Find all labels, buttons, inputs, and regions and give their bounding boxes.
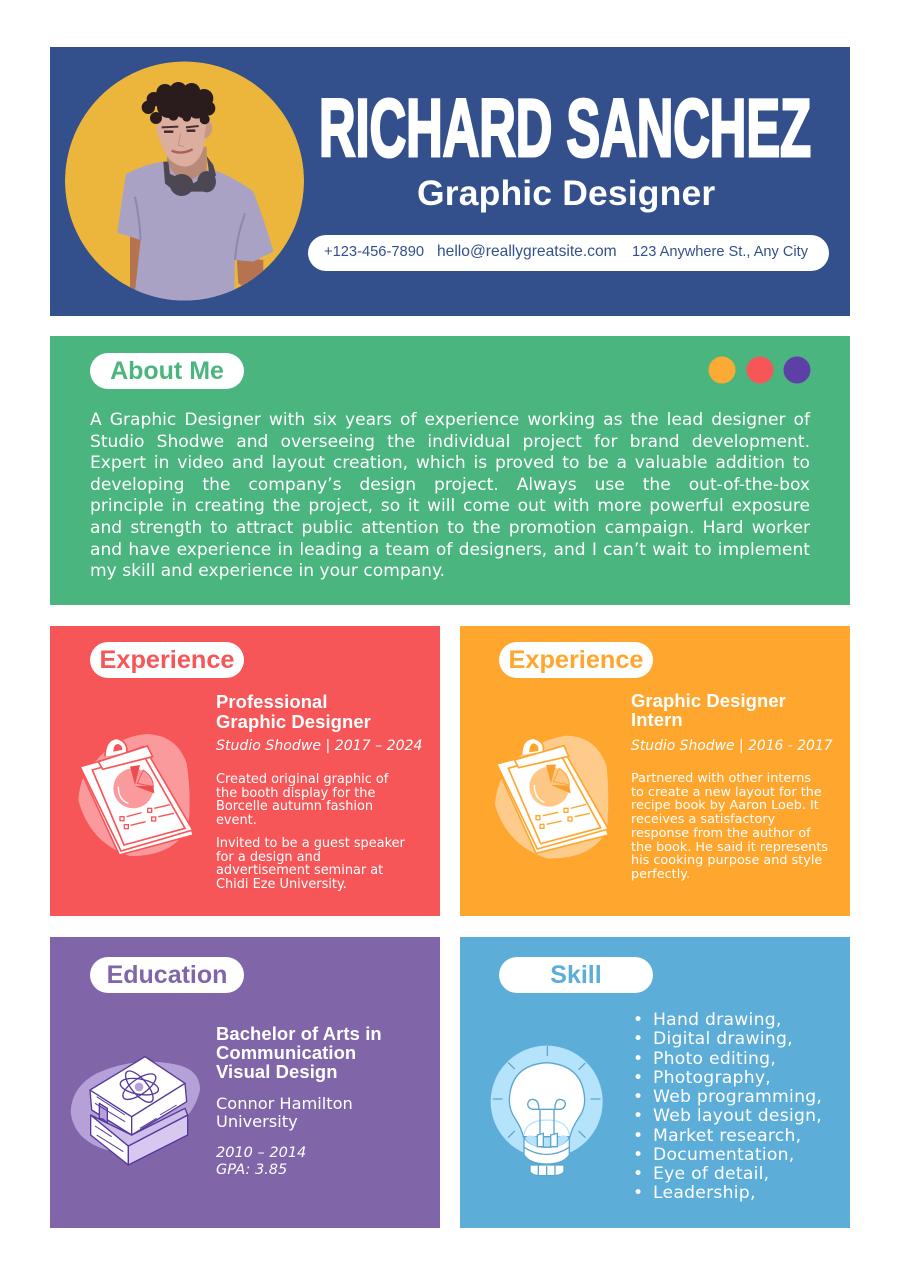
skills list: Photo editing, (653, 1048, 776, 1068)
job heading: Graphic Designer (216, 711, 371, 732)
job heading: Intern (631, 709, 683, 730)
job description: recipe book by Aaron Loeb. It (631, 798, 819, 813)
about text: Studio Shodwe and overseeing the individual project for brand development. (90, 432, 810, 452)
heading: education (90, 957, 244, 993)
job duties: Borcelle autumn fashion (216, 799, 373, 814)
job description: Partnered with other interns (631, 771, 811, 786)
speaking duties: for a design and (216, 850, 321, 865)
portrait photo (65, 62, 304, 300)
skills list: Photography, (653, 1068, 771, 1088)
panel: skills: • (633, 1010, 643, 1030)
degree heading: Visual Design (216, 1061, 338, 1082)
skills list: Hand drawing, (653, 1010, 782, 1030)
degree heading: Communication (216, 1042, 356, 1063)
skills list: Web layout design, (653, 1106, 822, 1126)
panel: education (50, 937, 440, 1228)
icon: clipboard chart (495, 736, 608, 858)
panel: experience professional (50, 626, 440, 916)
heading: experience (90, 642, 244, 678)
panel: about me (50, 336, 850, 605)
speaking duties (216, 836, 405, 892)
icon: books (70, 1056, 200, 1166)
panel: experience intern (460, 626, 850, 916)
job description: receives a satisfactory (631, 812, 775, 827)
dates and GPA: GPA: 3.85 (216, 1162, 287, 1178)
speaking duties: Chidi Eze University. (216, 877, 347, 892)
heading: skill: Skill (550, 961, 602, 989)
panel: skills: • (633, 1145, 643, 1165)
panel: skills: • (633, 1126, 643, 1146)
heading: experience (499, 642, 653, 678)
university: Connor Hamilton (216, 1094, 353, 1113)
degree heading (216, 1023, 382, 1082)
speaking duties: advertisement seminar at (216, 863, 383, 878)
university (216, 1094, 353, 1131)
job heading: Professional (216, 691, 328, 712)
panel: skills: • (633, 1087, 643, 1107)
about text: A Graphic Designer with six years of experience working as the lead designer of (90, 410, 810, 430)
job description: to create a new layout for the (631, 785, 822, 800)
job duties (216, 772, 389, 828)
skills list: Market research, (653, 1126, 801, 1146)
heading: skill (499, 957, 653, 993)
panel: skills (460, 937, 850, 1228)
job description: response from the author of (631, 826, 811, 841)
panel: skills: • (633, 1164, 643, 1184)
job description: perfectly. (631, 867, 690, 882)
panel: skills: • (633, 1029, 643, 1049)
address: 123 Anywhere St., Any City (632, 244, 808, 260)
university: University (216, 1112, 298, 1131)
job description: the book. He said it represents (631, 840, 828, 855)
degree heading: Bachelor of Arts in (216, 1023, 382, 1044)
panel: skills: • (633, 1048, 643, 1068)
job duties: Created original graphic of (216, 772, 388, 787)
heading: education: Education (107, 961, 227, 989)
about text: principle in creating the project, so it will come out with more powerful exposure (90, 496, 810, 516)
heading: experience: Experience (100, 646, 234, 674)
job heading (216, 691, 371, 732)
panel: header (50, 47, 850, 316)
dates and GPA (216, 1145, 306, 1178)
panel: skills: • (633, 1183, 643, 1203)
heading: about me (90, 353, 244, 389)
about text: developing the company’s design project. Always use the out-of-the-box (90, 475, 810, 495)
job description: his cooking purpose and style (631, 853, 822, 868)
company and dates: Studio Shodwe | 2016 - 2017 (631, 738, 833, 754)
email: hello@reallygreatsite.com (437, 243, 617, 260)
skills list: Web programming, (653, 1087, 822, 1107)
panel: skills: • (633, 1068, 643, 1088)
about text: and have experience in leading a team of designers, and I can’t wait to implement (90, 540, 810, 560)
dates and GPA: 2010 – 2014 (216, 1145, 306, 1161)
about text: my skill and experience in your company. (90, 561, 445, 581)
about text (90, 410, 810, 581)
job heading: Graphic Designer (631, 690, 786, 711)
job description (631, 771, 828, 882)
job duties: the booth display for the (216, 786, 375, 801)
skills list: Leadership, (653, 1183, 756, 1203)
skills list: Digital drawing, (653, 1029, 793, 1049)
heading: about me: About Me (110, 357, 224, 385)
icon: clipboard chart (78, 734, 192, 856)
heading: experience: Experience (508, 646, 644, 674)
about text: and strength to attract public attention to the promotion campaign. Hard worker (90, 518, 810, 538)
about text: Expert in video and layout creation, which is proved to be a valuable addition to (90, 453, 810, 473)
contact bar (308, 235, 829, 271)
skills list: Eye of detail, (653, 1164, 769, 1184)
phone: +123-456-7890 (324, 244, 424, 260)
job heading (631, 690, 786, 730)
skills list: Documentation, (653, 1145, 794, 1165)
icon: light bulb (490, 1046, 603, 1176)
skills list (633, 1010, 822, 1203)
decorative colored dots (708, 356, 810, 384)
speaking duties: Invited to be a guest speaker (216, 836, 405, 851)
panel: skills: • (633, 1106, 643, 1126)
company and dates: Studio Shodwe | 2017 – 2024 (216, 738, 422, 754)
job duties: event. (216, 813, 257, 828)
job title: Graphic Designer (417, 173, 715, 213)
